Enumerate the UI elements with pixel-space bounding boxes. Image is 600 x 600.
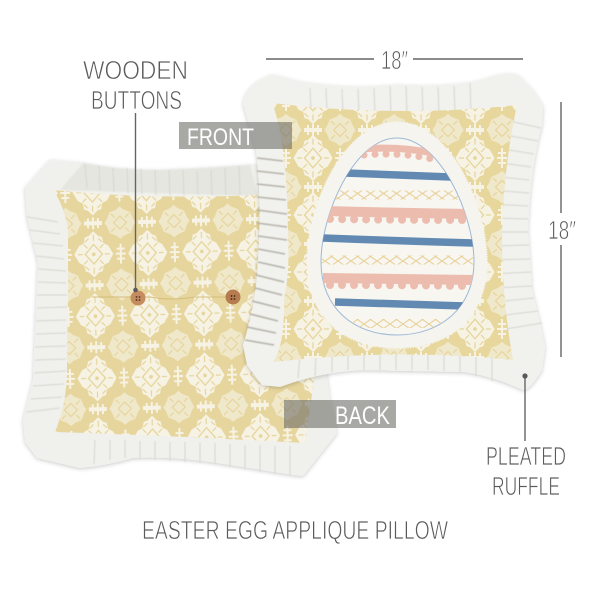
back pillow fabric [53,190,340,443]
label: pleated ruffle [486,443,566,501]
back pillow closure seam [92,297,240,299]
tag: back [284,400,396,430]
tag: back: BACK [335,402,390,430]
front pillow fabric [272,103,517,362]
label: wooden buttons: WOODEN [83,55,188,85]
label: wooden buttons [83,55,188,115]
egg applique patch [307,122,487,348]
label: pleated ruffle: RUFFLE [492,473,560,501]
egg body [321,138,474,335]
back pillow ruffle pleats [27,164,290,475]
leader line: pleated ruffle [522,373,528,441]
back pillow top ruffle shade [60,163,258,196]
icon: wooden button right [226,290,240,304]
back pillow [23,160,340,476]
caption: EASTER EGG APPLIQUE PILLOW [142,517,448,545]
front pillow ruffle pleats [245,158,287,345]
leader line: wooden buttons [133,113,138,292]
yellow cross stitch stripes [320,190,476,328]
egg stripes [320,148,476,328]
front pillow [243,74,545,390]
label: wooden buttons: BUTTONS [91,85,182,115]
pink scalloped trims [323,148,473,286]
icon: wooden button left [130,290,146,306]
label: pleated ruffle: PLEATED [486,443,566,471]
back pillow ruffle [23,160,337,476]
tag: front: FRONT [187,124,254,151]
blue ribbon stripes [323,173,473,306]
front pillow ruffle [243,74,545,390]
tag: front [179,122,292,151]
dimension: width 18 inches: 18″ [381,45,408,75]
dimension: height 18 inches: 18″ [548,215,576,245]
